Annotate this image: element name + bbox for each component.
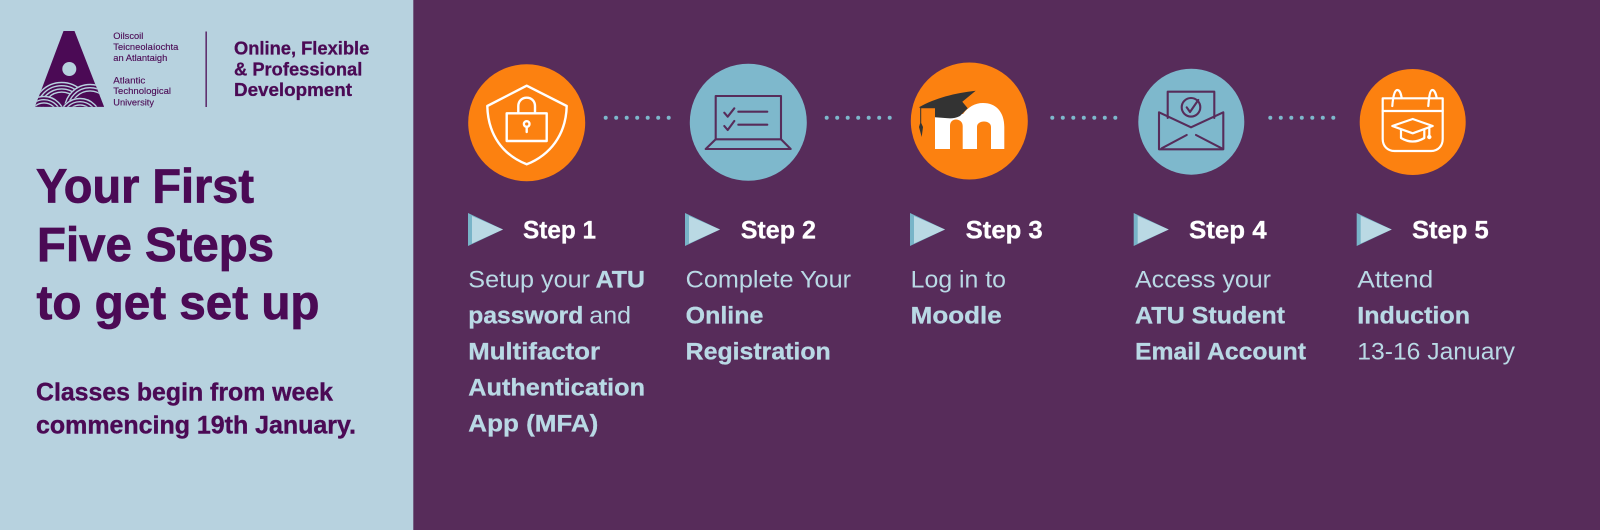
title: Your First	[36, 161, 254, 214]
dotted connector 1	[604, 116, 671, 120]
step 4 description: Access your	[1135, 266, 1271, 293]
step 1 description: Setup your	[468, 266, 590, 293]
logo wordmark: Oilscoil	[113, 31, 143, 41]
icon: Moodle logo	[911, 62, 1028, 180]
arrow: step 5	[1357, 213, 1392, 246]
left panel	[0, 0, 413, 530]
programme heading: & Professional	[234, 58, 362, 79]
programme heading	[234, 37, 369, 100]
classes begin note: commencing 19th January.	[36, 411, 356, 439]
icon: shield and padlock	[468, 64, 585, 181]
arrow: step 4	[1134, 213, 1169, 246]
dotted connector 2	[825, 116, 892, 120]
step 2 description	[686, 266, 851, 365]
title: to get set up	[36, 277, 320, 330]
dotted connector 3	[1050, 116, 1117, 120]
step 4	[1134, 213, 1306, 365]
step 4 description	[1135, 266, 1306, 365]
step 5 description	[1357, 266, 1516, 365]
logo wordmark: University	[113, 97, 154, 107]
step 1	[468, 213, 645, 437]
step 2 description: Complete Your	[686, 266, 851, 293]
step 4 description: Email Account	[1135, 338, 1306, 365]
step 3 description	[911, 266, 1006, 329]
arrow: step 2	[685, 213, 720, 246]
programme heading: Online, Flexible	[234, 37, 369, 58]
step 5	[1357, 213, 1516, 365]
step 1 description: Multifactor	[468, 338, 600, 365]
step 3 heading: Step 3	[966, 216, 1043, 244]
icon: laptop with checklist	[690, 64, 807, 181]
step 2 description: Online	[686, 302, 763, 329]
step 5 description: Attend	[1357, 266, 1433, 293]
programme heading: Development	[234, 79, 352, 100]
step 3 description: Log in to	[911, 266, 1006, 293]
step 1 description	[468, 266, 645, 437]
step 3	[910, 213, 1043, 329]
step 3 description: Moodle	[911, 302, 1002, 329]
logo wordmark	[113, 31, 179, 107]
step 5 description: Induction	[1357, 302, 1470, 329]
step 4 description: ATU Student	[1135, 302, 1285, 329]
step 1 description: password	[468, 302, 583, 329]
step 1 description: and	[589, 302, 631, 329]
dotted connector 4	[1268, 116, 1335, 120]
classes begin note	[36, 379, 356, 439]
step 1 description: Authentication	[468, 374, 645, 401]
icon: envelope with check	[1138, 69, 1244, 175]
step 1 heading: Step 1	[523, 216, 596, 244]
logo wordmark: Teicneolaíochta	[113, 42, 179, 52]
step 2 description: Registration	[686, 338, 831, 365]
step 1 description: ATU	[596, 266, 645, 293]
icon: ATU logo mark	[35, 31, 104, 107]
arrow: step 1	[468, 213, 503, 246]
step 5 description: 13-16 January	[1357, 338, 1516, 365]
step 5 heading: Step 5	[1412, 216, 1489, 244]
step 1 description: App (MFA)	[468, 410, 598, 437]
arrow: step 3	[910, 213, 945, 246]
step 2	[685, 213, 851, 365]
logo wordmark: Atlantic	[113, 75, 146, 85]
step 4 heading: Step 4	[1189, 216, 1267, 244]
right background panel	[413, 0, 1600, 530]
title	[36, 161, 320, 330]
logo wordmark: an Atlantaigh	[113, 53, 167, 63]
logo wordmark: Technological	[113, 86, 171, 96]
title: Five Steps	[37, 219, 274, 272]
icon: calendar with graduation cap	[1360, 69, 1466, 175]
classes begin note: Classes begin from week	[36, 379, 333, 407]
step 2 heading: Step 2	[741, 216, 816, 244]
